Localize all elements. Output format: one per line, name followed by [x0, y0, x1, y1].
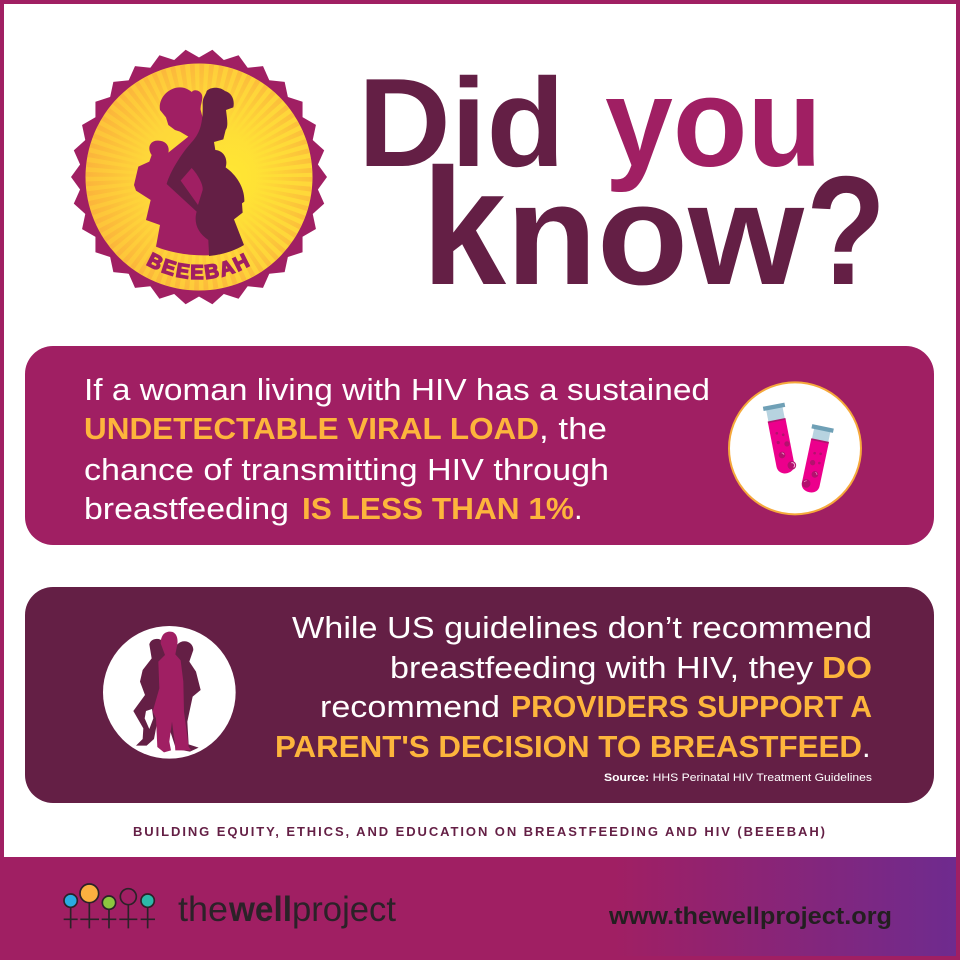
- logo wordmark: the: [178, 890, 228, 929]
- title letters: now: now: [506, 154, 805, 315]
- title question mark: ?: [806, 144, 886, 317]
- panel text: chance of transmitting HIV through: [84, 452, 609, 487]
- person centre: [153, 632, 191, 752]
- title letter: k: k: [422, 135, 507, 320]
- panel text: [275, 610, 872, 764]
- logo icon: five female symbols: [64, 884, 155, 928]
- title word: you: you: [605, 52, 822, 193]
- panel text: , the: [539, 411, 607, 446]
- panel text: recommend: [320, 689, 500, 724]
- panel text: .: [574, 491, 583, 526]
- source note: Source: HHS Perinatal HIV Treatment Guidelines: [604, 772, 873, 784]
- icon circle: [103, 626, 236, 759]
- footer band: [0, 857, 960, 960]
- badge label: BEEEBAH: [146, 252, 250, 280]
- icon circle: [729, 382, 861, 514]
- pregnant woman: [167, 88, 244, 256]
- panel: undetectable viral load: [25, 346, 934, 545]
- panel text: [84, 372, 710, 526]
- panel background: [25, 346, 934, 545]
- panel text: While US guidelines don’t recommend: [292, 610, 872, 645]
- person right: [165, 641, 201, 752]
- logo: The Well Project: project: [292, 890, 396, 929]
- icon: three people: [103, 626, 236, 759]
- silhouettes of two women: [134, 87, 244, 256]
- woman carrying baby: [134, 87, 209, 255]
- tagline: BUILDING EQUITY, ETHICS, AND EDUCATION ON BREASTFEEDING AND HIV (BEEEBAH): [133, 824, 825, 839]
- gap between arm and body: [181, 168, 203, 205]
- test tube left: [763, 403, 798, 475]
- sun disc: [86, 64, 312, 290]
- panel text: IS LESS THAN 1%: [302, 491, 574, 526]
- panel text: breastfeeding with HIV, they: [390, 650, 814, 685]
- gap between left legs: [145, 709, 153, 729]
- panel: provider support: [25, 587, 934, 803]
- sun rays: [142, 120, 256, 234]
- website url: www.thewellproject.org: [608, 903, 892, 930]
- panel text: PROVIDERS SUPPORT A: [511, 689, 872, 724]
- panel background: [25, 587, 934, 803]
- title word: Did: Did: [358, 52, 565, 193]
- footer background: [0, 857, 960, 960]
- test tube right: [798, 424, 834, 495]
- logo: The Well Project: well: [228, 890, 292, 929]
- panel text: .: [862, 729, 871, 764]
- person left: [133, 639, 170, 746]
- panel text: If a woman living with HIV has a sustained: [84, 372, 710, 407]
- panel text: UNDETECTABLE VIRAL LOAD: [84, 411, 539, 446]
- panel text: PARENT'S DECISION TO BREASTFEED: [275, 729, 862, 764]
- starburst edge: [23, 0, 359, 336]
- title: Did you know?: [358, 52, 886, 320]
- icon: test tubes: [729, 382, 861, 514]
- logo: The Well Project: [64, 884, 396, 929]
- badge: BEEEBAH: [71, 50, 327, 304]
- panel text: breastfeeding: [84, 491, 289, 526]
- panel text: DO: [822, 650, 872, 685]
